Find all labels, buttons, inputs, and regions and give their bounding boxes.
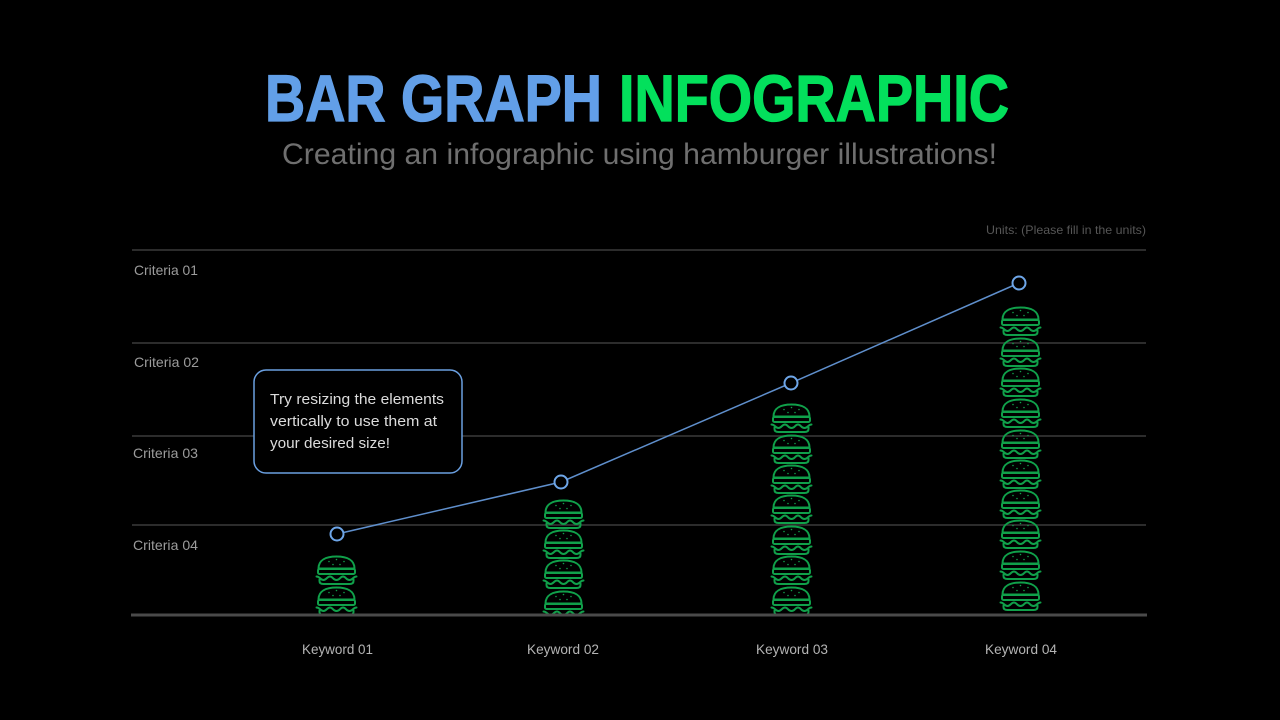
criteria labels: Criteria 01: [134, 262, 198, 278]
callout: [254, 370, 462, 473]
burger stack: keyword 02: [544, 500, 584, 619]
keyword labels: Keyword 02: [527, 641, 599, 657]
axis baseline: [131, 614, 1147, 616]
criteria labels: Criteria 03: [133, 445, 198, 461]
callout: vertically to use them at: [270, 413, 438, 430]
keyword labels: Keyword 01: [302, 641, 373, 657]
callout: your desired size!: [270, 435, 390, 452]
keyword labels: [302, 641, 1057, 657]
criteria labels: [133, 262, 199, 553]
keyword labels: Keyword 03: [756, 641, 828, 657]
callout: Try resizing the elements: [270, 391, 444, 408]
units note: Units: (Please fill in the units): [986, 223, 1146, 237]
criteria labels: Criteria 02: [134, 354, 199, 370]
criteria labels: Criteria 04: [133, 537, 198, 553]
trend line with markers: [330, 276, 1026, 540]
grid lines: [132, 250, 1146, 525]
title: [265, 61, 1009, 135]
title: INFOGRAPHIC: [619, 61, 1009, 135]
title: BAR GRAPH: [265, 61, 602, 135]
burger stack: keyword 01: [316, 556, 356, 615]
burger stack: keyword 03: [772, 404, 812, 615]
burger stack: keyword 04: [1000, 308, 1040, 610]
subtitle: Creating an infographic using hamburger illustrations!: [282, 138, 997, 171]
keyword labels: Keyword 04: [985, 641, 1057, 657]
